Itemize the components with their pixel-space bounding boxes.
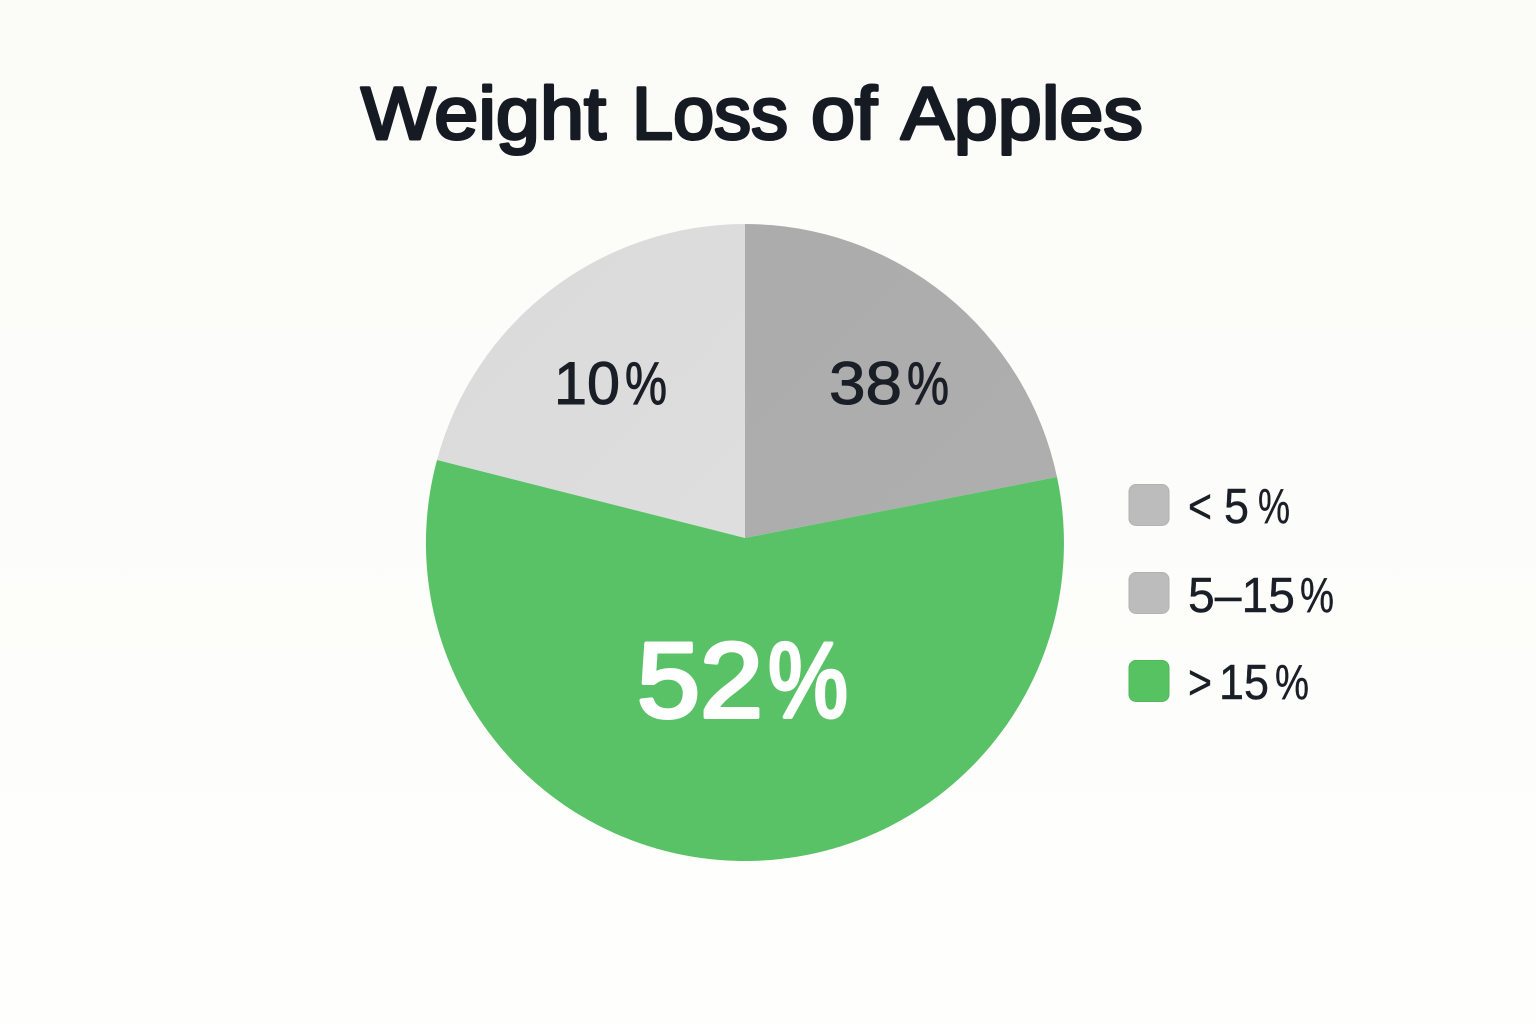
legend label: over 15%: 15 — [1219, 656, 1269, 710]
slice: 52% green — [426, 460, 1064, 861]
label: 38%: 38 — [829, 350, 902, 417]
legend label: over 15%: % — [1275, 656, 1309, 710]
title: Loss — [632, 72, 788, 155]
legend label: under 5%: 5 — [1224, 480, 1249, 534]
label: 52%: 52 — [637, 620, 763, 740]
pie chart — [426, 224, 1064, 861]
legend swatch: 5 to 15% — [1129, 572, 1169, 614]
legend label: 5 to 15%: % — [1300, 569, 1334, 623]
label: 10%: % — [625, 350, 667, 417]
label: 10%: 10 — [554, 350, 620, 417]
slice: 10% light gray — [437, 224, 745, 538]
legend label: over 15%: > — [1188, 656, 1212, 710]
legend — [1129, 480, 1334, 710]
title: Apples — [901, 72, 1143, 155]
slice: 38% medium gray — [745, 224, 1057, 538]
legend swatch: under 5% — [1129, 484, 1169, 526]
title: Weight — [361, 72, 606, 155]
label: 52%: % — [768, 620, 848, 740]
title: of — [811, 72, 877, 155]
legend label: 5 to 15%: 5–15 — [1188, 569, 1295, 623]
label: 38%: % — [907, 350, 949, 417]
legend swatch: over 15% — [1129, 660, 1169, 702]
legend label: under 5%: < — [1188, 480, 1212, 534]
legend label: under 5%: % — [1258, 480, 1290, 534]
